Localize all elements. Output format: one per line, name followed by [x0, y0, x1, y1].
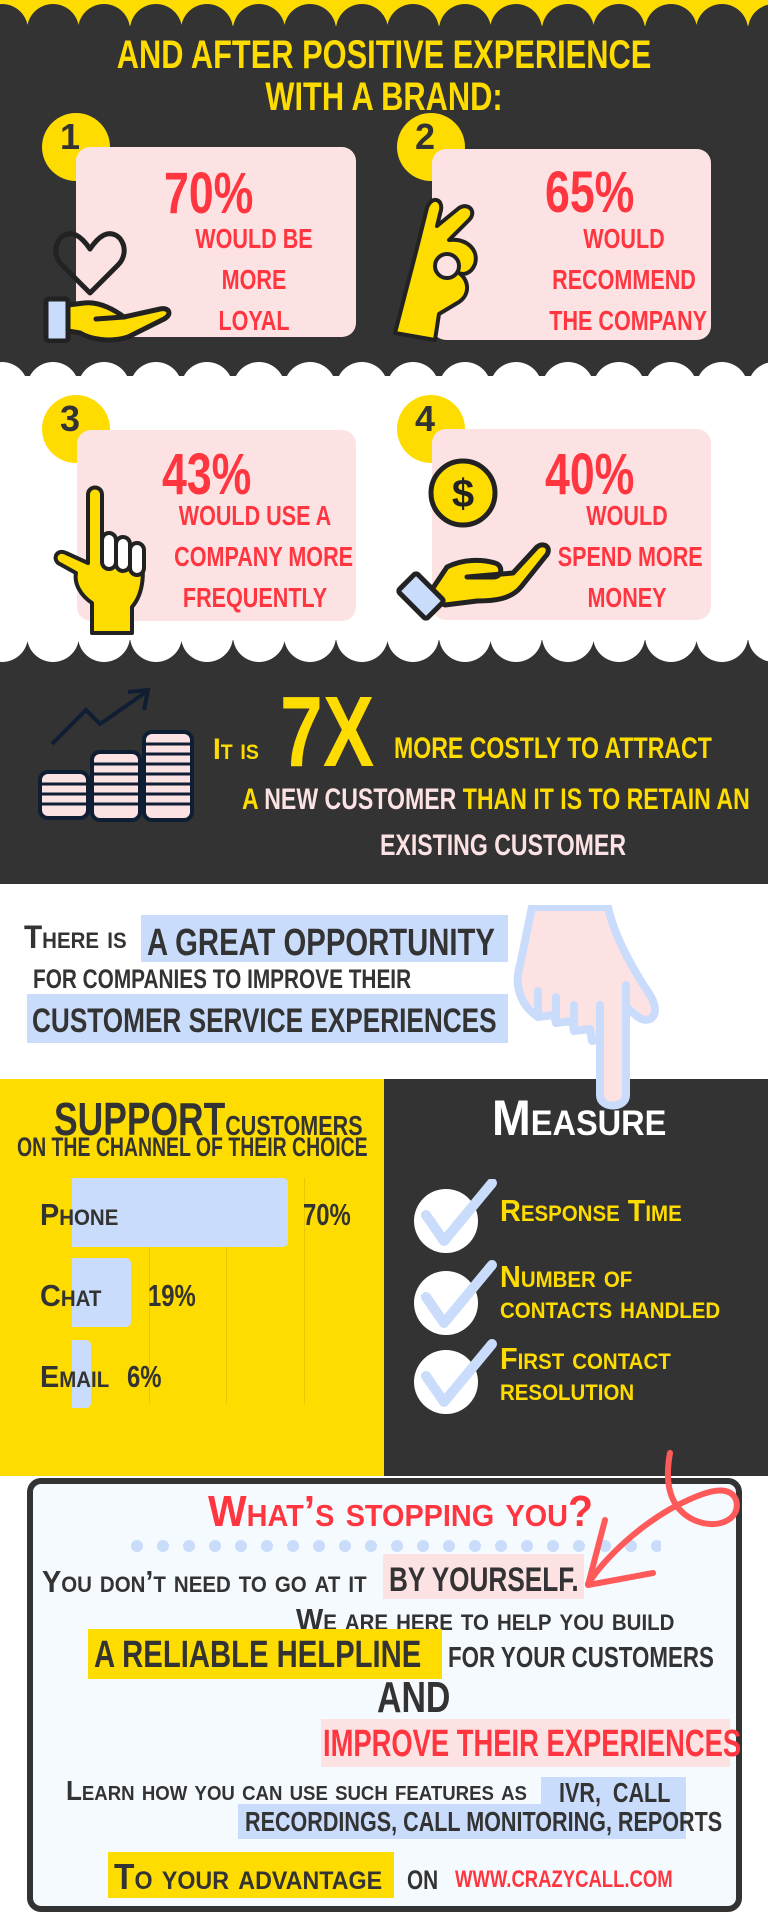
heading: support customers: SUPPORTCUSTOMERS — [54, 1093, 363, 1145]
panel: stat 3: FREQUENTLY — [183, 582, 327, 613]
panel: what's stopping you: IMPROVE THEIR EXPERIENCES — [323, 1723, 741, 1765]
text block: great opportunity: CUSTOMER SERVICE EXPERIENCES — [32, 1002, 497, 1040]
text: to your advantage — [108, 1852, 394, 1898]
heading: What’s stopping you? — [208, 1487, 593, 1536]
bar chart: 19% — [148, 1278, 196, 1313]
panel: stat 2: RECOMMEND — [552, 264, 696, 295]
bar chart: Phone — [40, 1197, 118, 1232]
bar chart: Email — [40, 1359, 109, 1394]
panel: measure: resolution — [500, 1372, 634, 1407]
text: 70% would be more loyal: 70% — [164, 161, 253, 226]
text: by yourself: BY YOURSELF. — [389, 1561, 579, 1599]
number badge 1: 1 — [60, 116, 80, 157]
number badge 1 — [42, 113, 110, 181]
text block: 7x more costly: MORE COSTLY TO ATTRACT — [394, 732, 712, 765]
icon: hand pointing down — [514, 905, 659, 1110]
panel: what's stopping you: To your advantage — [114, 1856, 382, 1897]
text block: great opportunity: A GREAT OPPORTUNITY — [147, 922, 495, 964]
dotted divider — [131, 1540, 661, 1552]
bar chart: Chat — [40, 1278, 101, 1313]
panel: what's stopping you: ON — [407, 1865, 438, 1895]
panel: what's stopping you: A RELIABLE HELPLINE — [94, 1634, 421, 1676]
text block: 7x more costly: It is — [213, 733, 259, 766]
panel: stat 3: COMPANY MORE — [174, 541, 353, 572]
icon: coin over hand: $ — [452, 472, 474, 516]
panel: measure: Number of — [500, 1259, 632, 1294]
number badge 4 — [397, 395, 465, 463]
panel: stat 2: THE COMPANY — [549, 305, 707, 336]
text: by yourself — [42, 1554, 584, 1599]
text: 40% would spend more money: 40% — [545, 442, 634, 507]
icon: ok hand — [393, 198, 478, 342]
panel: stat 1: LOYAL — [218, 305, 290, 336]
panel: what's stopping you — [27, 1478, 742, 1912]
panel: stat 4: SPEND MORE — [558, 541, 703, 572]
panel: stat 3: WOULD USE A — [179, 500, 331, 531]
list: metrics: Response Time — [500, 1193, 682, 1228]
text block: 7x more costly — [213, 676, 750, 862]
panel: stat 4: WOULD — [586, 500, 668, 531]
text block: great opportunity: There is — [24, 919, 127, 955]
panel: stat 1: WOULD BE — [195, 223, 313, 254]
text: helpline: We are here to help you build — [296, 1602, 674, 1637]
text: 65% would recommend the company: 65% — [545, 160, 634, 225]
bar chart — [40, 1178, 351, 1408]
bar chart: 6% — [127, 1359, 162, 1394]
text block: 7x more costly: A NEW CUSTOMER THAN IT IS TO RETAIN AN — [242, 783, 750, 816]
text block: great opportunity — [24, 915, 508, 1043]
number badge 2: 2 — [415, 116, 435, 157]
number badge 2 — [397, 113, 465, 181]
number badge 3 — [42, 395, 110, 463]
title — [117, 33, 651, 119]
text: by yourself: You don’t need to go at it — [42, 1564, 367, 1599]
text: and: AND — [377, 1673, 450, 1722]
panel: stat 3 — [42, 395, 356, 635]
icon: check marks — [414, 1179, 497, 1414]
number badge 3: 3 — [60, 398, 80, 439]
panel: stat 1: MORE — [222, 264, 286, 295]
bar chart: 70% — [303, 1197, 351, 1232]
panel: what's stopping you: FOR YOUR CUSTOMERS — [448, 1642, 714, 1674]
panel: what's stopping you: RECORDINGS, CALL MONITORING, REPORTS — [245, 1806, 722, 1837]
panel: stat 1 — [42, 113, 356, 343]
icon: coin over hand — [396, 458, 551, 621]
text block: 7x more costly: EXISTING CUSTOMER — [380, 829, 626, 862]
text: 43% would use a company more frequently: 43% — [162, 442, 251, 507]
panel: stat 2 — [393, 113, 711, 342]
panel: what's stopping you: WWW.CRAZYCALL.COM — [455, 1866, 673, 1893]
panel: measure: First contact — [500, 1341, 671, 1376]
icon: coin stacks with rising arrow — [38, 688, 194, 822]
panel: measure: contacts handled — [500, 1290, 720, 1325]
title: AND AFTER POSITIVE EXPERIENCE — [117, 33, 651, 77]
panel: measure — [414, 1090, 720, 1414]
panel: what's stopping you: Learn how you can use such features as — [66, 1775, 527, 1806]
panel: what's stopping you: IVR, CALL — [559, 1777, 670, 1808]
panel: stat 2: WOULD — [583, 223, 665, 254]
number badge 4: 4 — [415, 398, 435, 439]
title: WITH A BRAND: — [265, 75, 503, 119]
icon: heart in hand — [44, 231, 172, 343]
text: improve experiences — [321, 1719, 730, 1767]
text block: 7x more costly: 7X — [280, 676, 374, 788]
panel: support channels: ON THE CHANNEL OF THEIR CHOICE — [17, 1132, 368, 1162]
text block: great opportunity: FOR COMPANIES TO IMPROVE THEIR — [33, 964, 411, 994]
panel: support channels — [17, 1093, 368, 1408]
panel: stat 4: MONEY — [587, 582, 667, 613]
text: features — [541, 1777, 686, 1805]
heading: measure: Measure — [492, 1090, 666, 1146]
panel: stat 4 — [396, 395, 711, 621]
icon: pointing finger — [54, 486, 146, 635]
